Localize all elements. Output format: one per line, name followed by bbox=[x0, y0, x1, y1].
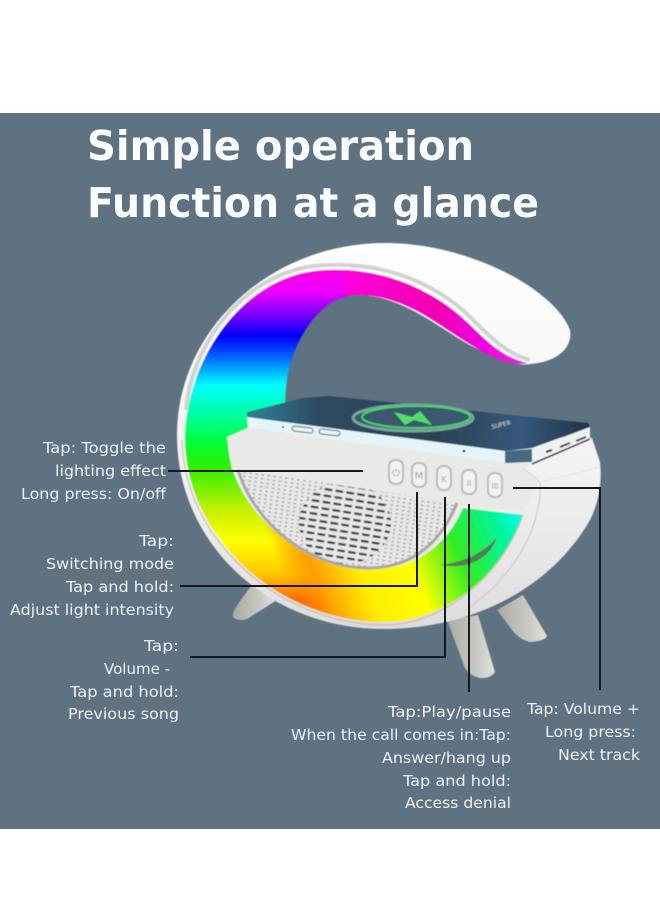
speaker grille bbox=[240, 472, 454, 567]
lightning icon bbox=[394, 411, 432, 425]
label: volume down button: Previous song bbox=[68, 705, 179, 723]
control buttons: II bbox=[467, 479, 471, 488]
label: volume down button: Tap: bbox=[143, 637, 179, 655]
label: volume up button bbox=[526, 700, 640, 764]
rim shading above light band bbox=[186, 265, 530, 410]
callout lines bbox=[168, 471, 600, 692]
device legs bbox=[233, 583, 547, 678]
label: mode button: Tap: bbox=[138, 532, 174, 550]
control buttons: ⏻ bbox=[392, 468, 400, 479]
label: volume up button: Next track bbox=[558, 746, 640, 764]
body contours bbox=[182, 440, 523, 625]
control buttons: K bbox=[441, 475, 447, 484]
label: mode button bbox=[10, 532, 174, 619]
label: volume up button: Long press: bbox=[545, 723, 636, 741]
label: mode button: Tap and hold: bbox=[65, 578, 174, 596]
label: volume up button: Tap: Volume + bbox=[526, 700, 640, 718]
label: play pause button bbox=[291, 703, 511, 812]
label: lighting button: lighting effect bbox=[55, 462, 166, 480]
label: volume down button: Tap and hold: bbox=[69, 683, 179, 701]
RGB light band bbox=[184, 269, 528, 623]
title: Simple operation bbox=[87, 122, 474, 170]
wireless charging ring bbox=[353, 405, 473, 431]
label: play pause button: When the call comes in:Tap: bbox=[291, 726, 511, 744]
white G-shaped lamp body bbox=[177, 243, 601, 629]
control buttons bbox=[389, 460, 502, 497]
label: lighting button bbox=[21, 439, 167, 503]
label: lighting button: Tap: Toggle the bbox=[42, 439, 166, 457]
label: volume down button bbox=[68, 637, 179, 723]
label: play pause button: Tap:Play/pause bbox=[387, 703, 511, 721]
smartphone on charger: SUPER bbox=[491, 419, 512, 431]
label: mode button: Switching mode bbox=[46, 555, 174, 573]
title: Function at a glance bbox=[87, 179, 539, 227]
label: play pause button: Access denial bbox=[405, 794, 511, 812]
label: play pause button: Tap and hold: bbox=[402, 772, 511, 790]
control buttons: III bbox=[491, 482, 499, 491]
device illustration bbox=[170, 243, 610, 678]
label: lighting button: Long press: On/off bbox=[21, 485, 167, 503]
label: play pause button: Answer/hang up bbox=[382, 749, 511, 767]
base front face bbox=[227, 428, 540, 510]
smartphone on charger bbox=[247, 396, 590, 464]
phone buttons bbox=[292, 426, 313, 433]
background panel bbox=[0, 113, 660, 829]
swoosh reflection bbox=[440, 537, 497, 566]
title bbox=[87, 122, 539, 227]
control buttons: M bbox=[415, 471, 423, 482]
label: volume down button: Volume - bbox=[104, 660, 170, 678]
label: mode button: Adjust light intensity bbox=[10, 601, 174, 619]
